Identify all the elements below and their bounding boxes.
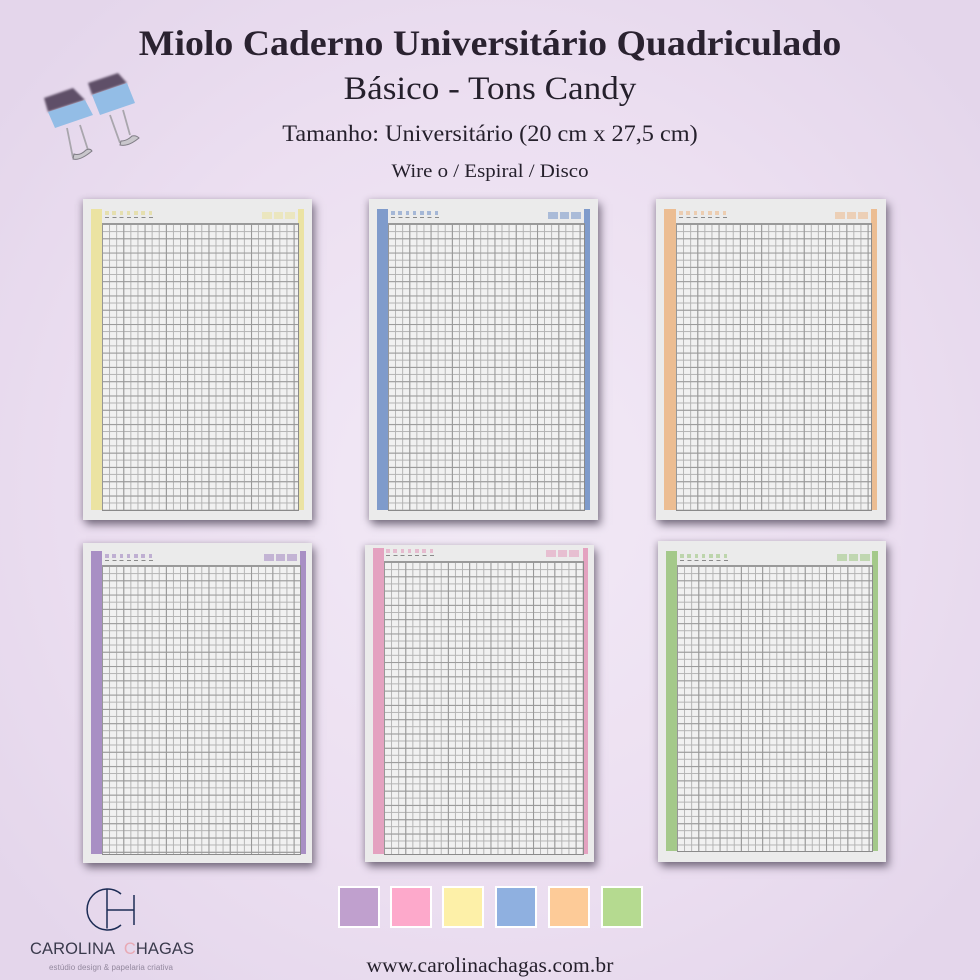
swatch: orange — [548, 886, 590, 928]
panel: green page — [658, 541, 886, 862]
swatch: blue — [495, 886, 537, 928]
yellow margin right — [298, 209, 304, 510]
date boxes — [262, 212, 295, 219]
weekday marks — [680, 554, 727, 558]
swatch: purple — [338, 886, 380, 928]
date boxes — [546, 550, 579, 557]
icon: CH monogram — [87, 889, 134, 930]
grid — [677, 565, 873, 852]
pink margin right — [583, 548, 588, 854]
swatch: yellow — [442, 886, 484, 928]
grid — [388, 223, 585, 511]
panel: yellow page — [83, 199, 312, 520]
logo: Carolina Chagas — [30, 888, 194, 972]
subtitle: Básico - Tons Candy — [344, 71, 636, 107]
date boxes — [835, 212, 868, 219]
grid — [102, 223, 299, 511]
blue margin right — [584, 209, 590, 510]
green margin left — [666, 551, 677, 851]
blue margin left — [377, 209, 388, 510]
grid — [676, 223, 872, 511]
weekday marks — [105, 554, 152, 558]
date boxes — [837, 554, 870, 561]
orange margin left — [664, 209, 676, 510]
green margin right — [872, 551, 878, 851]
date boxes — [548, 212, 581, 219]
website: www.carolinachagas.com.br — [367, 953, 613, 977]
swatch: green — [601, 886, 643, 928]
panel: blue page — [369, 199, 598, 520]
weekday marks — [679, 211, 726, 215]
tagline: estúdio design & papelaria criativa — [49, 963, 174, 972]
weekday marks — [391, 211, 438, 215]
size text: Tamanho: Universitário (20 cm x 27,5 cm) — [282, 121, 698, 146]
icon: binder clips — [42, 72, 140, 160]
binding text: Wire o / Espiral / Disco — [391, 161, 589, 182]
grid — [102, 565, 301, 855]
date boxes — [264, 554, 297, 561]
panel: purple page — [83, 543, 312, 863]
pink margin left — [373, 548, 384, 854]
orange margin right — [871, 209, 877, 510]
purple margin left — [91, 551, 102, 854]
purple margin right — [300, 551, 306, 854]
grid — [384, 561, 584, 855]
weekday marks — [105, 211, 152, 215]
panel: orange page — [656, 199, 886, 520]
weekday marks — [386, 549, 433, 553]
panel: pink page — [365, 545, 594, 862]
wordmark: CAROLINA CHAGAS — [30, 940, 194, 958]
yellow margin left — [91, 209, 102, 510]
title: Miolo Caderno Universitário Quadriculado — [139, 23, 841, 63]
swatch: pink — [390, 886, 432, 928]
